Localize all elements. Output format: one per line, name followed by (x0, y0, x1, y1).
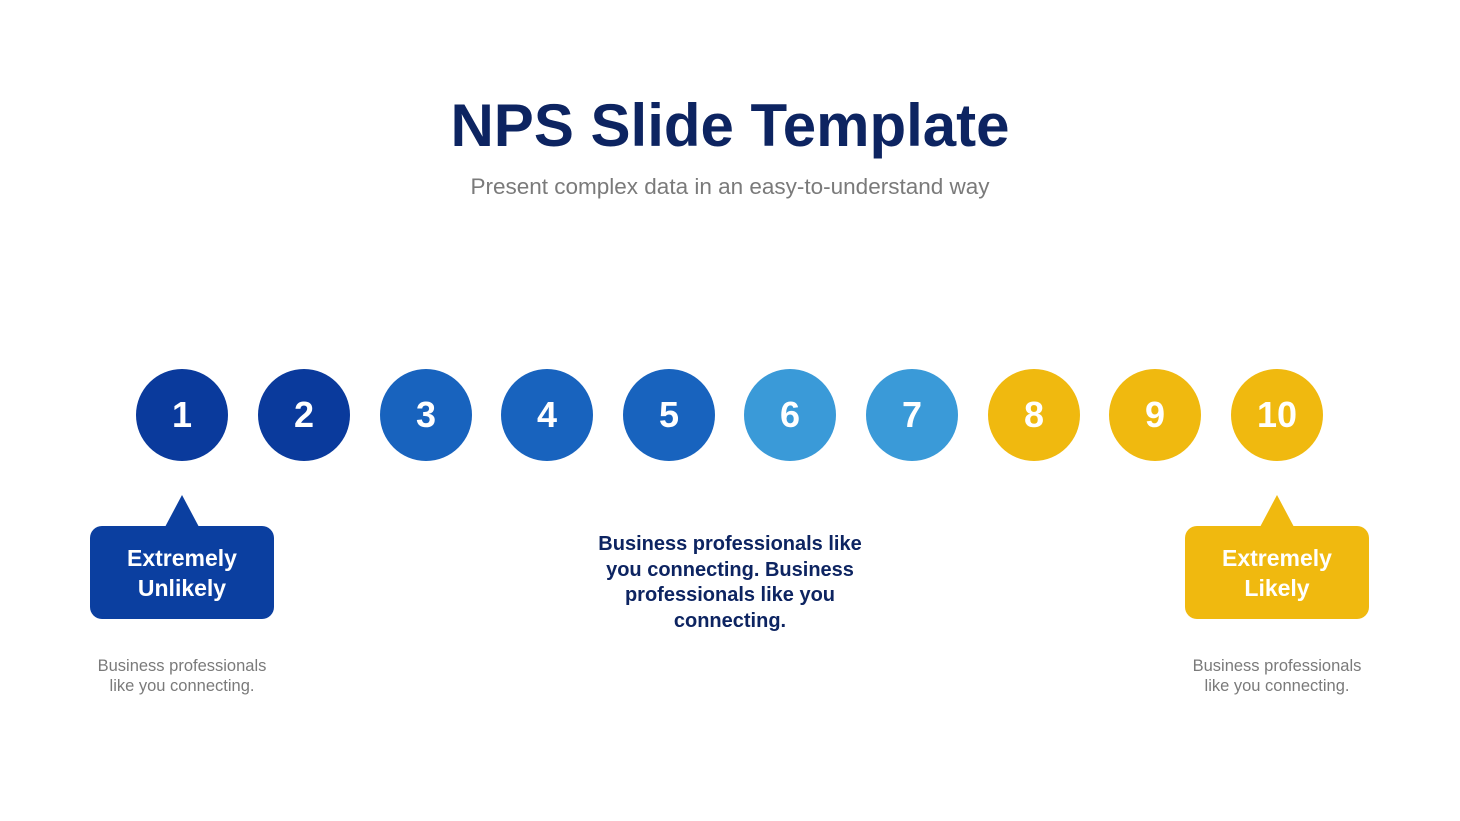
circle 2 (258, 369, 350, 461)
circle 8: 8 (1024, 394, 1044, 435)
circle 10: 10 (1257, 394, 1297, 435)
callout: extremely unlikely: Unlikely (138, 575, 226, 601)
circle 5: 5 (659, 394, 679, 435)
right description: like you connecting. (1205, 677, 1349, 695)
circle 8 (988, 369, 1080, 461)
left description: Business professionals (98, 657, 266, 675)
callout: extremely likely: Extremely (1222, 545, 1332, 571)
circle 6 (744, 369, 836, 461)
title: NPS Slide Template (450, 92, 1010, 159)
subtitle: Present complex data in an easy-to-understand way (470, 174, 990, 199)
circle 5 (623, 369, 715, 461)
callout: extremely likely (1185, 495, 1369, 619)
callout: extremely likely: Likely (1244, 575, 1310, 601)
circle 7 (866, 369, 958, 461)
circle 1: 1 (172, 394, 192, 435)
left description (98, 657, 266, 695)
circle 9 (1109, 369, 1201, 461)
center text: Business professionals like you connecting. Business professionals like you connecting. (598, 533, 862, 632)
right description: Business professionals (1193, 657, 1361, 675)
circle 10 (1231, 369, 1323, 461)
circle 1 (136, 369, 228, 461)
left description: like you connecting. (110, 677, 254, 695)
callout: extremely unlikely: Extremely (127, 545, 237, 571)
circle 4: 4 (537, 394, 557, 435)
right description (1193, 657, 1361, 695)
circle 7: 7 (902, 394, 922, 435)
callout: extremely unlikely (90, 495, 274, 619)
circle 9: 9 (1145, 394, 1165, 435)
circle 4 (501, 369, 593, 461)
circle 6: 6 (780, 394, 800, 435)
circle 2: 2 (294, 394, 314, 435)
circle 3 (380, 369, 472, 461)
circle 3: 3 (416, 394, 436, 435)
